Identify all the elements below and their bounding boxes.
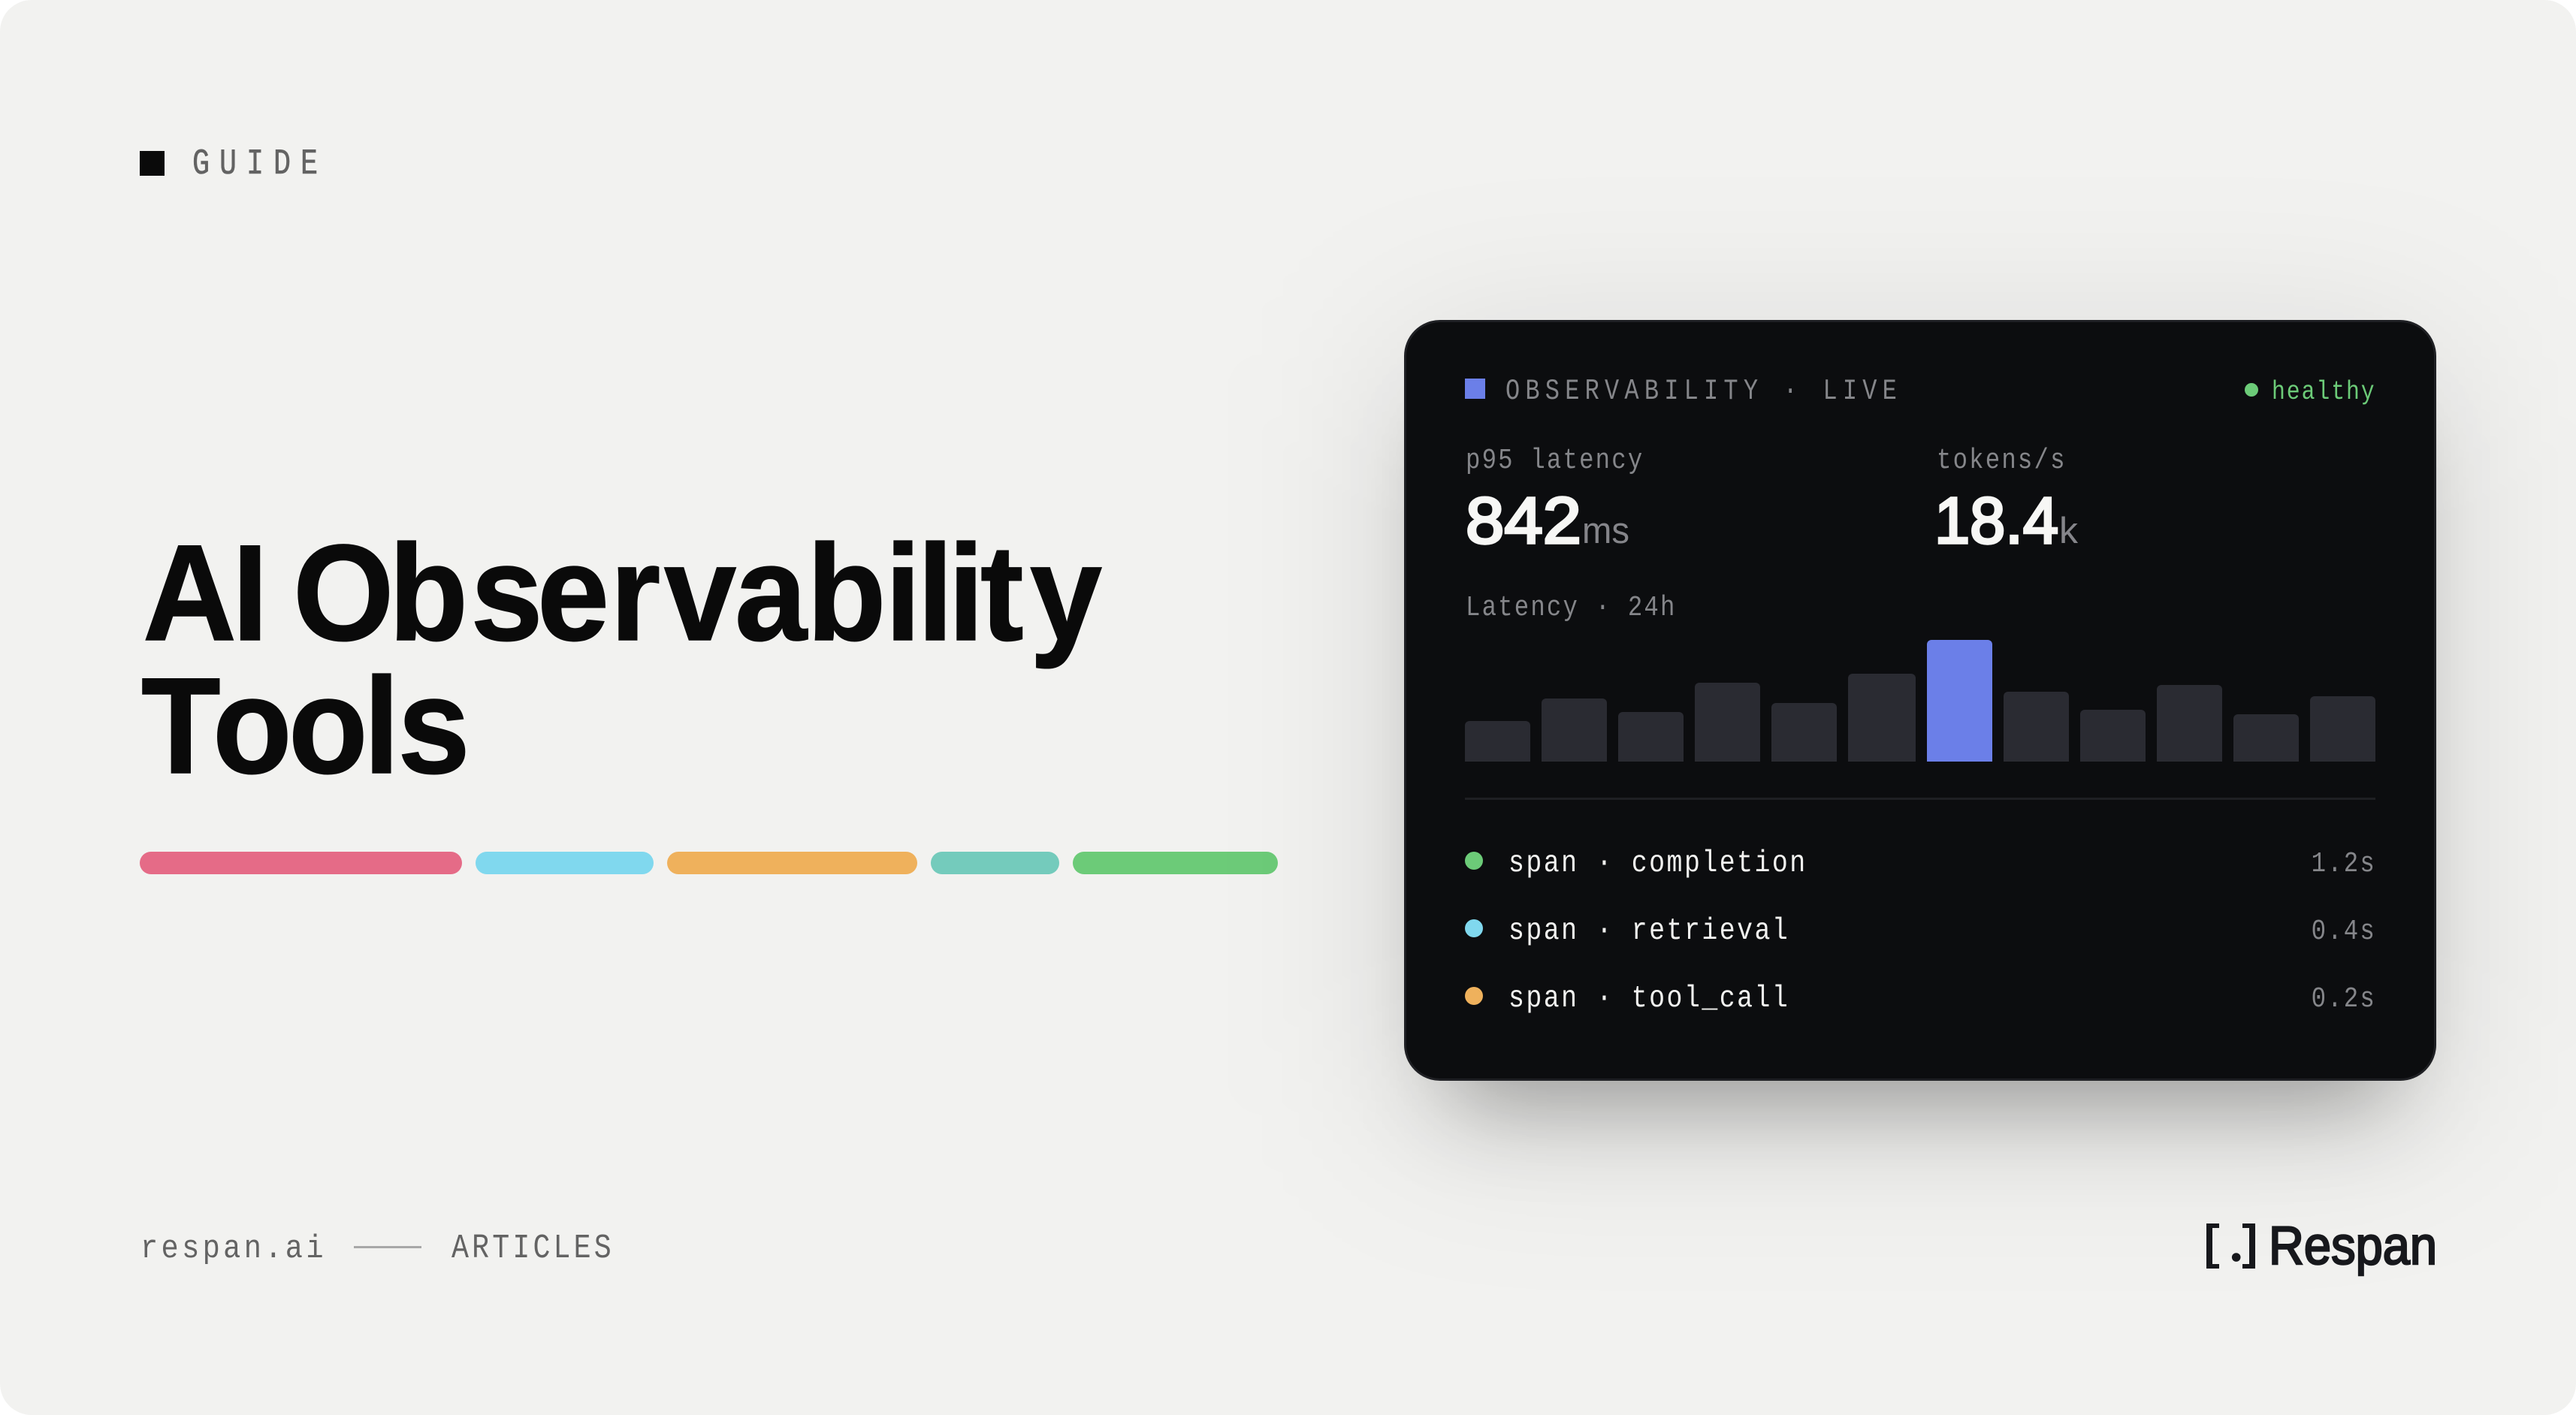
metric: tokens per second: k [2059, 511, 2079, 551]
title: Tools [141, 649, 470, 802]
span row: completion [1465, 846, 2376, 881]
span row: retrieval: span · retrieval [1508, 914, 1789, 949]
span row: completion: span · completion [1508, 846, 1807, 881]
metric: tokens per second: tokens/s [1937, 445, 2067, 477]
eyebrow: guide label: GUIDE [192, 144, 328, 185]
chart label: Latency · 24h [1466, 592, 1677, 624]
span row: retrieval: 0.4s [2312, 916, 2376, 948]
colour pills [140, 852, 1278, 874]
span row: tool call: 0.2s [2312, 983, 2376, 1015]
footer: site and section [140, 1229, 615, 1268]
metric: p95 latency: 842 [1466, 484, 1581, 557]
card header label: OBSERVABILITY · LIVE [1505, 374, 1902, 408]
span row: tool call [1465, 982, 2376, 1016]
footer: site and section: respan.ai [140, 1231, 327, 1268]
metric: p95 latency [1466, 445, 1644, 557]
footer: site and section: ARTICLES [451, 1229, 615, 1268]
bar chart: latency 24h [1465, 640, 2375, 762]
title [141, 516, 1102, 802]
metric: p95 latency: ms [1582, 511, 1629, 551]
icon: bracket mark [2206, 1223, 2255, 1269]
span row: tool call: span · tool_call [1508, 982, 1789, 1016]
logo: Respan [2206, 1217, 2437, 1276]
span row: completion: 1.2s [2312, 848, 2376, 880]
title: AI Observability [143, 516, 1102, 669]
logo: Respan: Respan [2269, 1217, 2437, 1276]
span row: retrieval [1465, 914, 2376, 949]
metric: tokens per second [1934, 445, 2079, 557]
panel: observability dashboard card [1405, 321, 2436, 1080]
metric: tokens per second: 18.4 [1934, 484, 2058, 557]
health status: healthy [2272, 377, 2376, 407]
metric: p95 latency: p95 latency [1466, 445, 1644, 477]
card shadow [1404, 354, 2436, 1115]
